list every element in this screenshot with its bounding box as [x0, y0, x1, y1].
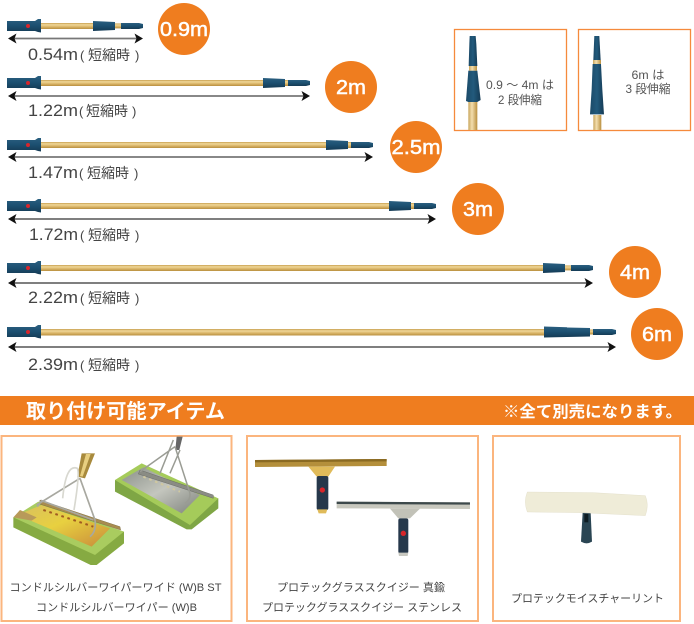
- caption: wide wiper: コンドルシルバーワイパーワイド (W)B ST: [10, 581, 222, 594]
- badge: 2m: 2m: [336, 77, 366, 99]
- dimension arrow: 2.39m: [8, 342, 616, 352]
- length label: 0.54m: 短縮時: [88, 47, 130, 63]
- length label: 0.54m: (: [80, 48, 85, 63]
- text: two-stage note: [486, 78, 554, 107]
- image: brass wiper: [13, 453, 124, 565]
- panel: two-stage detail: [454, 30, 566, 130]
- banner note: ※全て別売になります。: [503, 402, 682, 421]
- badge: 0.9m: 0.9m: [160, 19, 208, 41]
- panel: silver wipers: [2, 436, 232, 621]
- length label: 1.72m: 1.72m: [29, 226, 78, 244]
- length label: 2.39m: 短縮時: [88, 357, 130, 373]
- length label: 2.22m: 短縮時: [88, 290, 130, 306]
- text: three-stage note: [626, 68, 670, 96]
- pole: 0.9m: [7, 3, 210, 64]
- dimension arrow: 1.22m: [8, 91, 310, 101]
- badge: 3m: 3m: [463, 199, 493, 221]
- length label: 0.54m: 0.54m: [28, 46, 78, 64]
- badge: 6m: [631, 308, 683, 360]
- image: stainless wiper: [115, 437, 218, 529]
- length label: 2.39m: ): [135, 358, 139, 373]
- icon: two-stage pole tip: [466, 36, 481, 130]
- pole: 6m: [7, 308, 683, 374]
- badge: 0.9m: [158, 3, 210, 55]
- length label: 1.47m: ): [134, 166, 138, 181]
- badge: 2.5m: [390, 121, 442, 173]
- badge: 4m: [609, 246, 661, 298]
- dimension arrow: 0.54m: [8, 34, 143, 44]
- pole: 2m: [7, 61, 377, 120]
- length label: 1.47m: (: [79, 166, 84, 181]
- banner heading: 取り付け可能アイテム: [26, 400, 225, 423]
- length label: 1.22m: 1.22m: [28, 102, 78, 120]
- length label: 1.22m: (: [79, 104, 84, 119]
- pole: 3m: [7, 183, 504, 244]
- length label: 1.72m: (: [80, 228, 85, 243]
- length label: 1.22m: ): [132, 104, 136, 119]
- panel: glass squeegees: [247, 436, 478, 621]
- panel: three-stage detail: [578, 30, 690, 130]
- text: three-stage note: 6m は: [632, 68, 664, 82]
- badge: 4m: 4m: [620, 262, 650, 284]
- text: three-stage note: 3 段伸縮: [626, 81, 670, 96]
- badge: 3m: [452, 183, 504, 235]
- length label: 2.22m: (: [80, 291, 85, 306]
- panel: moisturiser lint: [493, 436, 680, 621]
- length label: 1.72m: 短縮時: [88, 227, 130, 243]
- badge: 2m: [325, 61, 377, 113]
- caption: wiper: コンドルシルバーワイパー (W)B: [36, 601, 197, 614]
- length label: 2.22m: 2.22m: [28, 289, 78, 307]
- caption: brass squeegee: プロテックグラススクイジー 真鍮: [277, 580, 445, 594]
- length label: 1.22m: 短縮時: [86, 103, 128, 119]
- length label: 1.47m: 1.47m: [28, 164, 78, 182]
- length label: 2.39m: 2.39m: [28, 356, 78, 374]
- pole: 2.5m: [7, 121, 442, 182]
- length label: 0.54m: ): [135, 48, 139, 63]
- length label: 2.39m: (: [80, 358, 85, 373]
- length label: 2.22m: ): [135, 291, 139, 306]
- caption: stainless squeegee: プロテックグラススクイジー ステンレス: [262, 600, 462, 614]
- banner: compatible items: [0, 396, 694, 425]
- caption: moisturiser lint: プロテックモイスチャーリント: [511, 592, 664, 605]
- text: two-stage note: 0.9 ～ 4m は: [486, 78, 554, 92]
- image: moisturiser sleeve: [525, 492, 647, 543]
- text: two-stage note: 2 段伸縮: [498, 92, 542, 107]
- length label: 1.47m: 短縮時: [87, 165, 129, 181]
- dimension arrow: 1.72m: [8, 214, 436, 224]
- image: stainless squeegee: [337, 502, 470, 556]
- dimension arrow: 2.22m: [8, 278, 593, 288]
- length label: 1.72m: ): [135, 228, 139, 243]
- dimension arrow: 1.47m: [8, 152, 373, 162]
- badge: 6m: 6m: [642, 324, 672, 346]
- icon: three-stage pole tip: [590, 36, 604, 130]
- pole: 4m: [7, 246, 661, 307]
- image: brass squeegee: [255, 459, 387, 513]
- badge: 2.5m: 2.5m: [392, 137, 440, 159]
